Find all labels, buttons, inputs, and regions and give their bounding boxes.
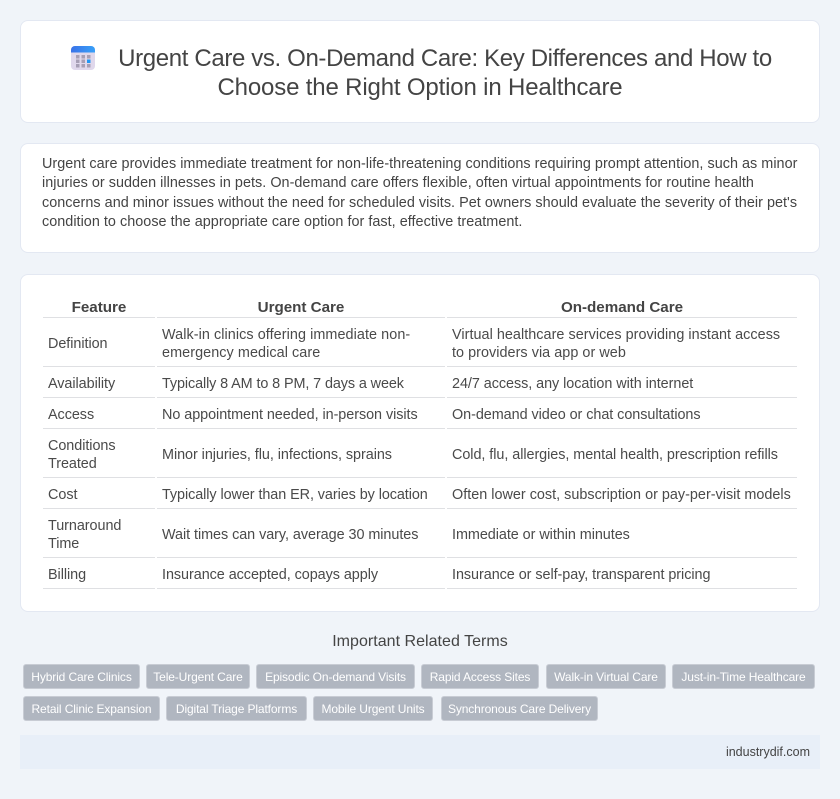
intro text: injuries or sudden illnesses in pets. On-demand care offers flexible, often virtual appointments for routine health — [42, 175, 754, 191]
header: feature: Feature — [72, 299, 126, 316]
row: definition: Definition — [48, 336, 108, 352]
icon: calendar — [71, 46, 95, 70]
header: on-demand care: On-demand Care — [561, 299, 683, 316]
intro panel — [20, 143, 820, 253]
intro text: concerns and minor issues without the need for scheduled visits. Pet owners should evaluate the severity of their pet's — [42, 195, 797, 211]
comparison table: Walk-in clinics offering immediate non- — [162, 327, 410, 343]
comparison table: 24/7 access, any location with internet — [452, 376, 693, 392]
related terms tags — [23, 664, 815, 721]
header: urgent care: Urgent Care — [258, 299, 344, 316]
row: conditions treated — [48, 438, 116, 472]
row: turnaround time: Time — [48, 536, 79, 552]
row: turnaround time — [48, 518, 121, 552]
comparison table: Minor injuries, flu, infections, sprains — [162, 447, 392, 463]
comparison table: Typically 8 AM to 8 PM, 7 days a week — [162, 376, 404, 392]
comparison table: Wait times can vary, average 30 minutes — [162, 527, 418, 543]
comparison table — [43, 299, 797, 589]
tag — [256, 664, 415, 689]
comparison table: On-demand video or chat consultations — [452, 407, 701, 423]
row: conditions treated: Treated — [48, 456, 97, 472]
row: turnaround time: Turnaround — [48, 518, 121, 534]
intro text — [42, 156, 798, 230]
comparison table: Typically lower than ER, varies by location — [162, 487, 428, 503]
comparison table: No appointment needed, in-person visits — [162, 407, 418, 423]
row: conditions treated: Conditions — [48, 438, 116, 454]
header panel — [20, 20, 820, 123]
row: availability: Availability — [48, 376, 115, 392]
comparison table: to providers via app or web — [452, 345, 626, 361]
tag: Synchronous Care Delivery — [448, 702, 591, 716]
tag: Hybrid Care Clinics — [31, 670, 132, 684]
comparison table: Often lower cost, subscription or pay-per-visit models — [452, 487, 791, 503]
comparison table: Cold, flu, allergies, mental health, prescription refills — [452, 447, 778, 463]
tag — [546, 664, 666, 689]
row: access: Access — [48, 407, 94, 423]
tag: Tele-Urgent Care — [153, 670, 243, 684]
tag: Just-in-Time Healthcare — [681, 670, 806, 684]
footer bar — [20, 735, 820, 769]
comparison table: Insurance accepted, copays apply — [162, 567, 378, 583]
tag — [23, 696, 160, 721]
intro text: condition to choose the appropriate care option for fast, effective treatment. — [42, 214, 522, 230]
tag — [166, 696, 307, 721]
tag: Walk-in Virtual Care — [554, 670, 658, 684]
intro text: Urgent care provides immediate treatment for non-life-threatening conditions requiring prompt attention, such as minor — [42, 156, 797, 172]
tag: Digital Triage Platforms — [176, 702, 297, 716]
tag: Retail Clinic Expansion — [32, 702, 151, 716]
tag: Episodic On-demand Visits — [265, 670, 406, 684]
title — [118, 45, 772, 101]
tag — [146, 664, 250, 689]
tag — [421, 664, 539, 689]
tag — [672, 664, 815, 689]
tag: Mobile Urgent Units — [321, 702, 425, 716]
tag — [313, 696, 433, 721]
comparison table panel — [20, 274, 820, 612]
tag: Rapid Access Sites — [430, 670, 530, 684]
row: cost: Cost — [48, 487, 77, 503]
title: Urgent Care vs. On-Demand Care: Key Differences and How to — [118, 45, 772, 72]
comparison table: emergency medical care — [162, 345, 320, 361]
title: Choose the Right Option in Healthcare — [218, 74, 622, 101]
footer site name: industrydif.com — [726, 745, 810, 759]
comparison table: Insurance or self-pay, transparent pricing — [452, 567, 710, 583]
related terms heading: Important Related Terms — [332, 633, 508, 650]
comparison table: Virtual healthcare services providing instant access — [452, 327, 780, 343]
tag — [441, 696, 598, 721]
comparison table: Immediate or within minutes — [452, 527, 630, 543]
row: billing: Billing — [48, 567, 86, 583]
tag — [23, 664, 140, 689]
